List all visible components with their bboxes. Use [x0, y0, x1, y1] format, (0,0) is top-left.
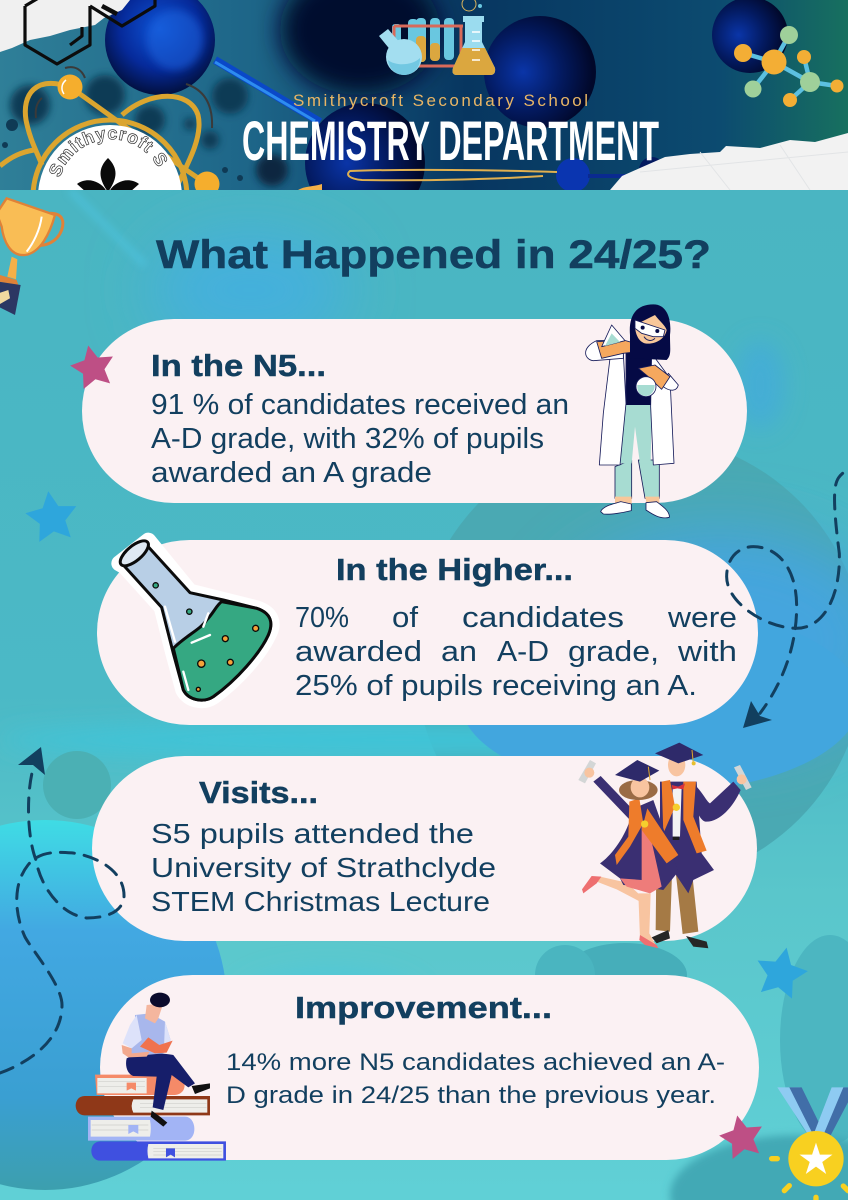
text: improvement details: D grade in 24/25 than the previous year.: [226, 1082, 716, 1109]
text: Higher results: with: [677, 636, 737, 668]
heading: Improvement: Improvement...: [295, 990, 552, 1025]
panel: Higher: [97, 540, 758, 725]
icon: graduates: [578, 743, 752, 948]
icon: conical flask: [116, 537, 272, 700]
text: Higher results: 70%: [295, 602, 349, 634]
text: Higher results: 25% of pupils receiving an A.: [295, 670, 697, 702]
torn paper corners: [0, 0, 848, 190]
dashed arrow: left: [0, 747, 124, 1073]
text: N5 results: 91 % of candidates received an: [151, 389, 569, 421]
school name: Smithycroft Secondary School: [293, 91, 588, 110]
text: improvement details: 14% more N5 candidates achieved an A-: [226, 1049, 725, 1076]
text: Higher results: an: [441, 636, 477, 668]
panel: Visits: [92, 756, 757, 941]
logo flower: [77, 158, 139, 192]
text: N5 results: [151, 389, 569, 489]
text: N5 results: awarded an A grade: [151, 457, 432, 489]
icon: molecule top right: [734, 26, 844, 107]
heading: In the N5: In the N5...: [151, 348, 326, 383]
text: Higher results: were: [667, 602, 737, 634]
star: pink bottom right: [716, 1111, 767, 1161]
icon: medal: [772, 1087, 848, 1200]
gold underline scribble: [348, 170, 557, 180]
text: visit details: University of Strathclyde: [151, 852, 496, 883]
text: Higher results: candidates: [462, 602, 624, 634]
star: pink top left: [67, 341, 118, 391]
text: Higher results: [295, 602, 737, 702]
panel: N5: [82, 319, 747, 503]
text: Higher results: of: [392, 602, 419, 634]
icon: atom school logo: [0, 66, 220, 190]
icon: scientist with flasks: [586, 304, 678, 518]
logo lettering: Smithycroft S: [49, 129, 168, 177]
heading: In the Higher: In the Higher...: [336, 552, 573, 587]
text: visit details: STEM Christmas Lecture: [151, 886, 490, 917]
text: visit details: [151, 818, 496, 917]
text: Higher results: grade,: [568, 636, 659, 668]
header banner: [0, 0, 848, 190]
text: Higher results: A-D: [497, 636, 549, 668]
icon: student reading on books: [76, 993, 226, 1161]
text: Higher results: awarded: [295, 636, 422, 668]
star: blue right: [751, 942, 812, 1001]
text: visit details: S5 pupils attended the: [151, 818, 474, 849]
text: improvement details: [226, 1049, 725, 1109]
icon: hexagon molecule: [25, 0, 155, 64]
title: What Happened in 24/25?: [156, 233, 711, 277]
panel: Improvement: [100, 975, 759, 1160]
icon: flasks and test tube rack: [379, 0, 495, 75]
dashed arrow: right: [727, 473, 843, 728]
icon: trophy: [0, 198, 63, 315]
molecule balls: [105, 0, 787, 190]
text: N5 results: A-D grade, with 32% of pupils: [151, 423, 544, 455]
dark blurred shapes: [2, 0, 440, 186]
star: blue left: [23, 488, 80, 543]
heading: Visits: Visits...: [199, 775, 318, 810]
